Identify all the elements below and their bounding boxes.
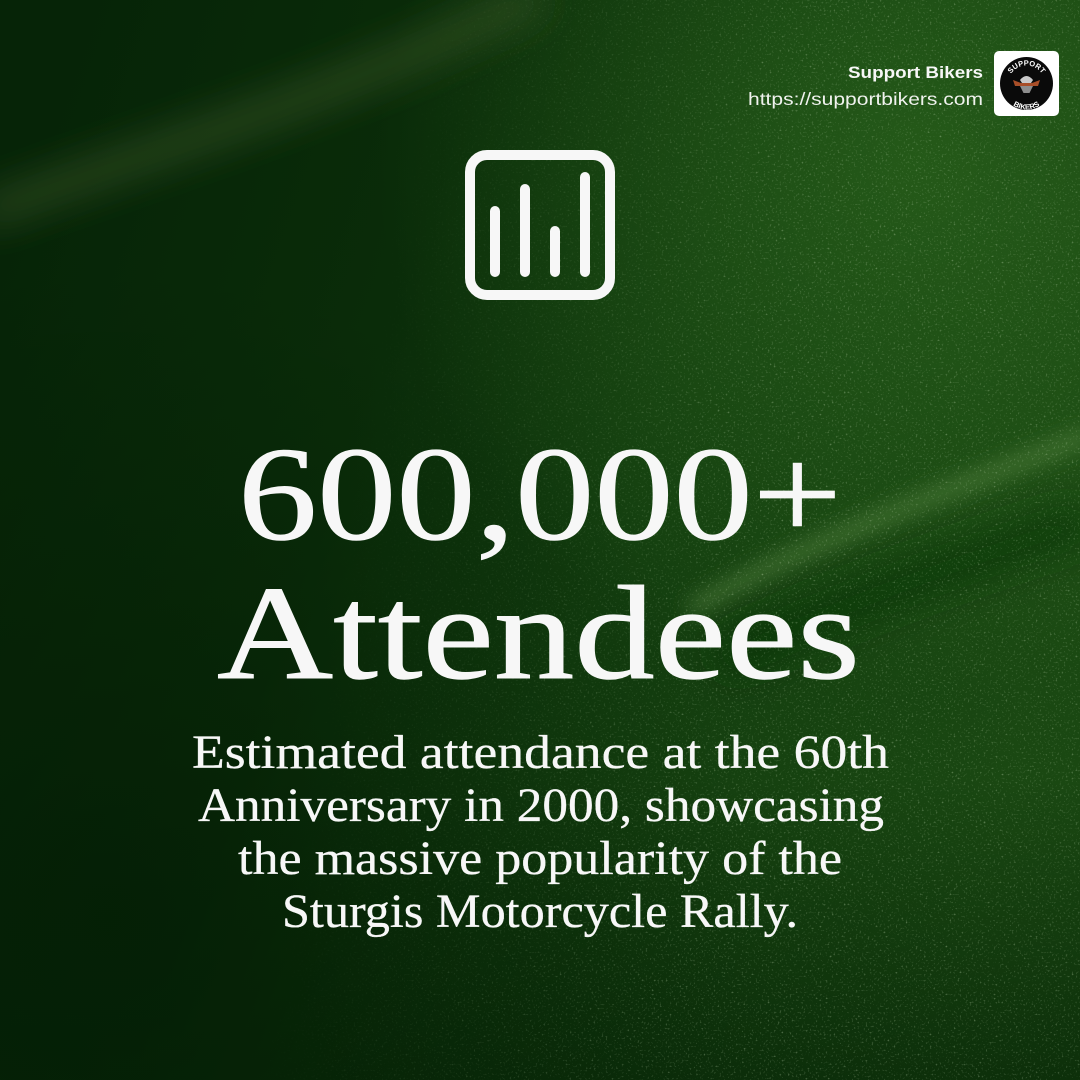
description text (192, 726, 889, 938)
headline number: 600,000+ (238, 420, 842, 568)
description text: Sturgis Motorcycle Rally. (282, 885, 798, 938)
brand name: Support Bikers (848, 63, 983, 82)
brand logo: SUPPORT (1008, 60, 1046, 73)
headline label: Attendees (217, 559, 860, 707)
headline (217, 420, 860, 707)
icon: bar chart in rounded square (470, 155, 610, 295)
brand block (748, 51, 1059, 116)
description text: the massive popularity of the (238, 832, 842, 885)
description text: Anniversary in 2000, showcasing (198, 779, 884, 832)
brand url: https://supportbikers.com (748, 89, 983, 109)
brand logo (994, 51, 1059, 116)
description text: Estimated attendance at the 60th (192, 726, 889, 779)
brand logo: BIKERS (1014, 101, 1040, 110)
